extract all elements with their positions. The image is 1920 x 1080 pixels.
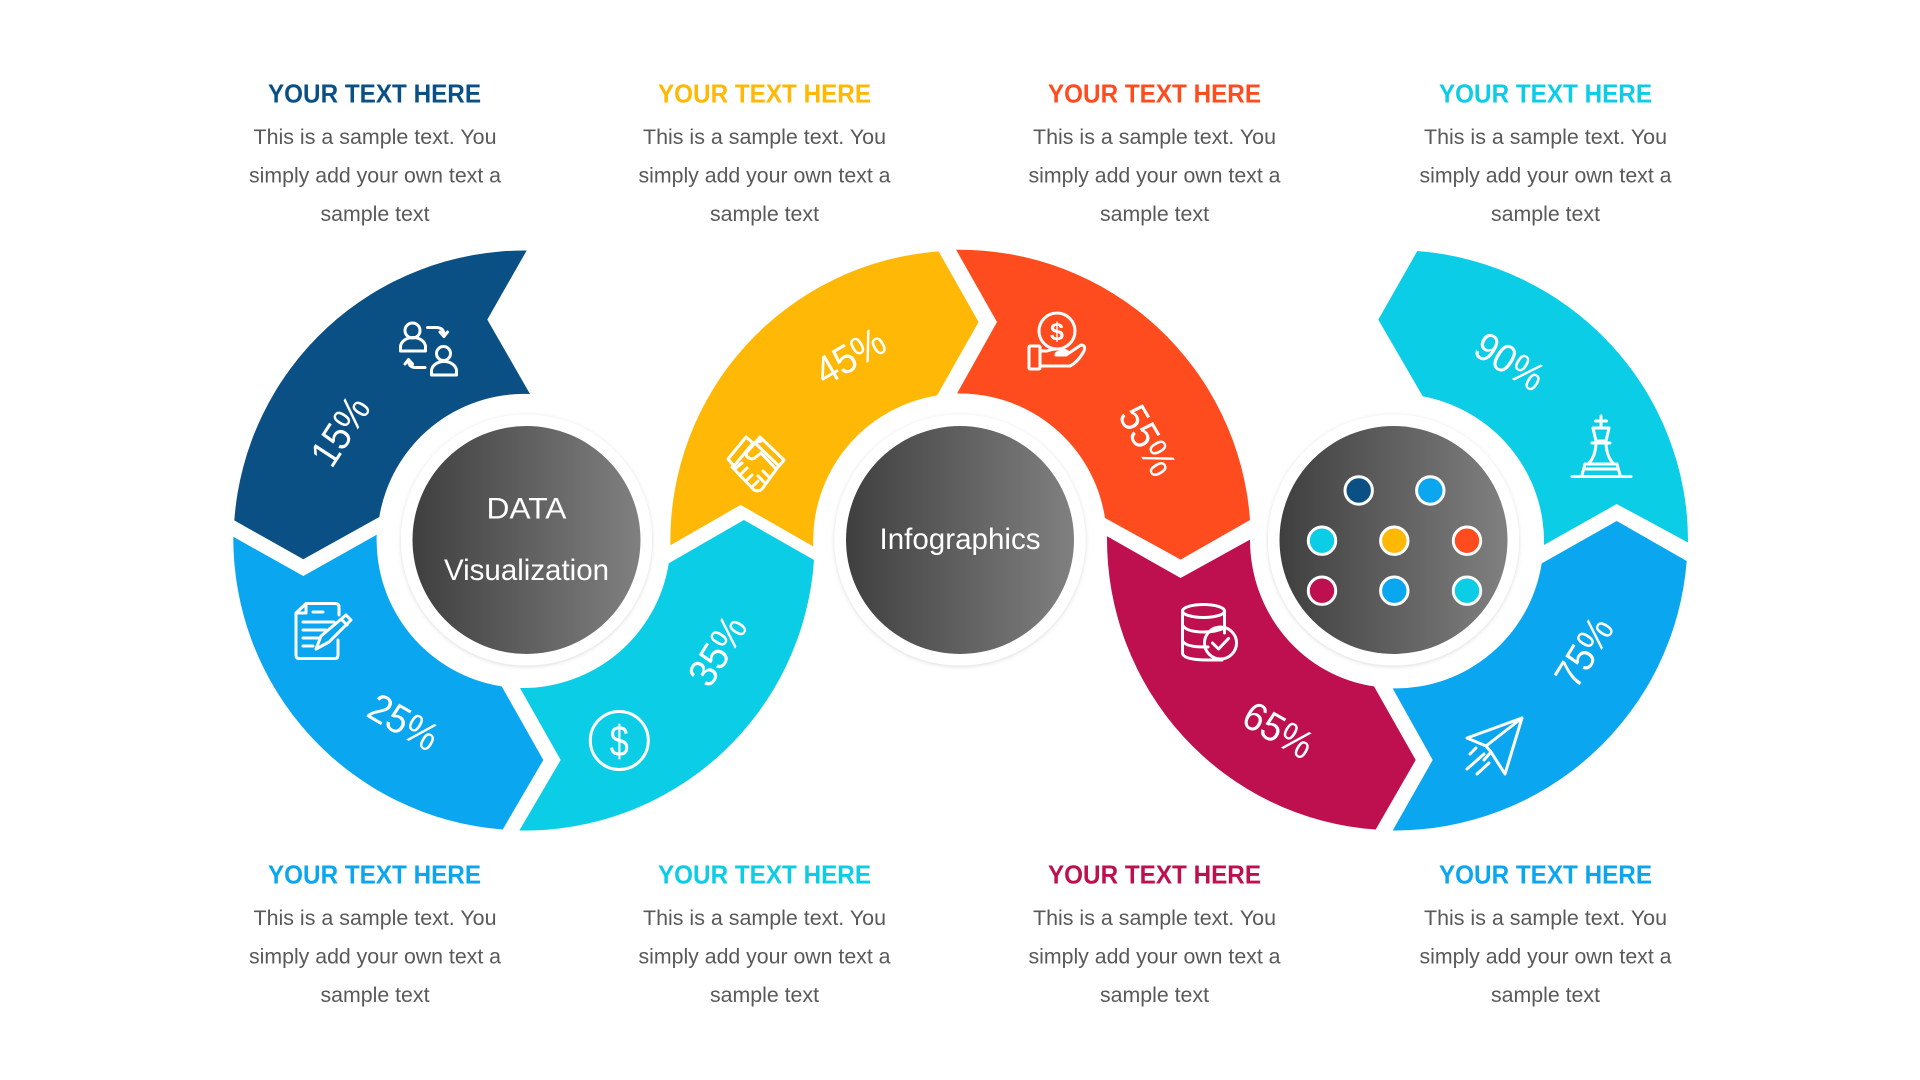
text block: top 1: simply add your own text a	[249, 164, 501, 187]
text block: top 3: sample text	[1100, 203, 1209, 226]
text block: bottom 4	[1420, 860, 1672, 1007]
text block: bottom 4: This is a sample text. You	[1424, 907, 1667, 930]
icon: paper plane	[1467, 718, 1522, 774]
percent: 55%: 55%	[1110, 398, 1185, 484]
text block: bottom 3: YOUR TEXT HERE	[1048, 860, 1261, 890]
icon: hand holding coin	[1029, 313, 1085, 369]
text block: bottom 3: This is a sample text. You	[1033, 907, 1276, 930]
text block: bottom 3	[1028, 860, 1281, 1007]
text block: top 2: sample text	[710, 203, 819, 226]
left hub: DATA Visualization: DATA	[486, 492, 566, 526]
left hub: DATA Visualization: Visualization	[444, 554, 609, 587]
text block: top 4	[1420, 79, 1672, 226]
text block: top 3: simply add your own text a	[1028, 164, 1281, 187]
text block: top 4: YOUR TEXT HERE	[1439, 79, 1652, 109]
text block: bottom 3: simply add your own text a	[1028, 945, 1281, 968]
segment: 90% cyan	[1378, 251, 1688, 545]
left hub: DATA Visualization	[401, 414, 652, 666]
icon: hand holding coin: $	[1050, 318, 1064, 346]
icon: handshake	[728, 437, 784, 491]
text block: bottom 1: This is a sample text. You	[254, 907, 496, 930]
text block: top 3: YOUR TEXT HERE	[1048, 79, 1261, 109]
percent: 15%: 15%	[302, 389, 379, 475]
percent: 75%: 75%	[1546, 609, 1623, 696]
text block: bottom 2: This is a sample text. You	[643, 907, 886, 930]
text block: top 2: This is a sample text. You	[643, 126, 886, 149]
segment: 25% blue	[233, 535, 543, 830]
right hub: colored dots	[1268, 414, 1519, 666]
segment: 45% yellow	[670, 251, 979, 546]
text block: top 4: simply add your own text a	[1420, 164, 1672, 187]
text block: top 1: sample text	[320, 203, 430, 226]
percent: 25%: 25%	[360, 685, 446, 760]
icon: document and pencil	[296, 604, 351, 658]
text block: top 4: sample text	[1491, 203, 1600, 226]
text block: bottom 1: simply add your own text a	[249, 945, 501, 968]
segment: 35% cyan	[519, 520, 814, 831]
text block: top 2: YOUR TEXT HERE	[658, 79, 871, 109]
percent: 65%: 65%	[1235, 693, 1321, 768]
percent: 90%: 90%	[1466, 324, 1553, 401]
text block: top 2: simply add your own text a	[638, 164, 891, 187]
percent: 35%: 35%	[680, 608, 756, 694]
text block: top 1	[249, 79, 501, 226]
text block: top 1: YOUR TEXT HERE	[268, 79, 481, 109]
text block: top 3: This is a sample text. You	[1033, 126, 1276, 149]
segment: 75% blue	[1393, 521, 1687, 831]
text block: bottom 4: sample text	[1491, 984, 1600, 1007]
text block: bottom 3: sample text	[1100, 984, 1209, 1007]
text block: bottom 4: YOUR TEXT HERE	[1439, 860, 1652, 890]
segment: 65% crimson	[1107, 536, 1416, 830]
icon: chess king	[1572, 416, 1631, 476]
icon: dollar coin	[590, 712, 648, 770]
text block: bottom 1: YOUR TEXT HERE	[268, 860, 481, 890]
text block: top 3	[1028, 79, 1281, 226]
center hub: Infographics: Infographics	[880, 523, 1040, 556]
text block: bottom 2	[638, 860, 891, 1007]
text block: top 4: This is a sample text. You	[1424, 126, 1667, 149]
text block: bottom 2: simply add your own text a	[638, 945, 891, 968]
icon: dollar coin: $	[610, 717, 629, 766]
text block: bottom 2: YOUR TEXT HERE	[658, 860, 871, 890]
icon: people exchange	[400, 323, 456, 375]
text block: top 2	[638, 79, 891, 226]
text block: bottom 1	[249, 860, 501, 1007]
text block: bottom 2: sample text	[710, 984, 819, 1007]
text block: top 1: This is a sample text. You	[254, 126, 496, 149]
text block: bottom 4: simply add your own text a	[1420, 945, 1672, 968]
text block: bottom 1: sample text	[320, 984, 430, 1007]
center hub: Infographics	[834, 414, 1086, 666]
percent: 45%: 45%	[807, 319, 894, 394]
icon: database with check	[1182, 604, 1236, 660]
segment: 55% red	[956, 250, 1250, 560]
segment: 15% navy	[234, 250, 530, 559]
